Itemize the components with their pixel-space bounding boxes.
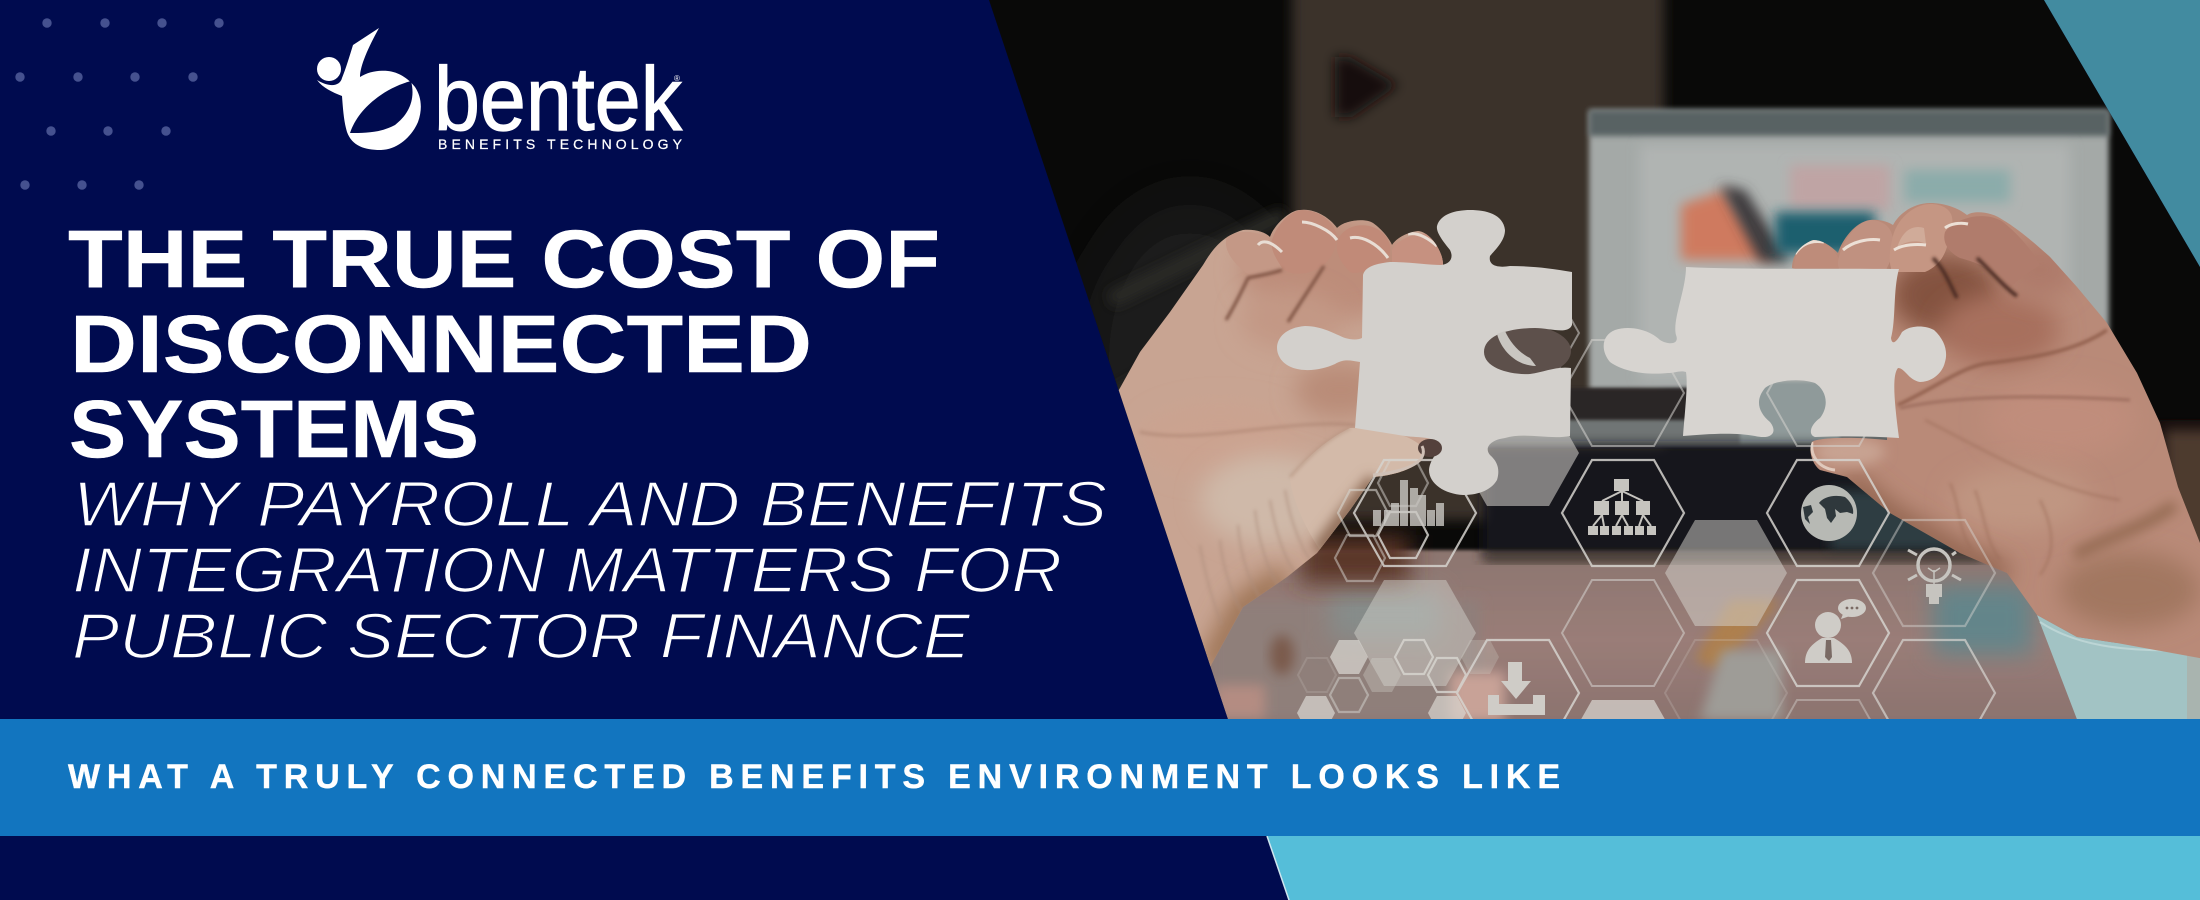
outline hexagons behind pieces xyxy=(1297,318,1871,719)
shirt cuff xyxy=(2037,615,2200,722)
logo: bentek xyxy=(317,28,683,152)
icon: swoosh figure xyxy=(317,28,421,150)
cyan bottom panel xyxy=(1267,836,2200,900)
right puzzle piece xyxy=(1604,267,1946,438)
title: THE TRUE COST OF xyxy=(68,214,940,305)
notch background behind left piece xyxy=(1483,326,1571,376)
title xyxy=(68,214,940,475)
blurred office background xyxy=(980,0,2200,730)
thumb xyxy=(1304,428,1422,550)
fingertips xyxy=(1226,210,1444,275)
filled translucent hexagons xyxy=(1297,436,1787,719)
subtitle: WHY PAYROLL AND BENEFITS xyxy=(73,468,1107,540)
bright outline hexagons xyxy=(1330,460,1995,746)
title: SYSTEMS xyxy=(69,384,479,475)
tagline: BENEFITS TECHNOLOGY xyxy=(438,136,683,152)
teal corner shape xyxy=(2044,0,2200,267)
wordmark: bentek xyxy=(434,50,683,150)
icon: download arrow xyxy=(1488,662,1545,715)
icon: phone in notch xyxy=(1497,331,1536,366)
icon: person with speech bubble xyxy=(1805,599,1866,663)
subtitle: PUBLIC SECTOR FINANCE xyxy=(72,600,971,672)
blue banner xyxy=(0,719,2200,836)
icon: org chart xyxy=(1588,479,1656,535)
fingertips xyxy=(1864,204,2024,272)
subtitle: INTEGRATION MATTERS FOR xyxy=(72,534,1062,606)
right hand xyxy=(1780,190,2200,670)
left hand xyxy=(1118,210,1443,666)
icon: bar chart xyxy=(1373,480,1444,526)
cyan panel edge highlight xyxy=(1267,836,1289,900)
icon: light bulb xyxy=(1908,549,1961,604)
subtitle xyxy=(72,468,1107,672)
decorative dot grid xyxy=(15,18,224,190)
left puzzle piece xyxy=(1277,210,1572,495)
registered mark: ® xyxy=(674,74,680,83)
icon: globe xyxy=(1801,485,1857,541)
left thumb nail xyxy=(1373,446,1423,475)
title: DISCONNECTED xyxy=(70,299,812,390)
banner text: WHAT A TRULY CONNECTED BENEFITS ENVIRONMENT LOOKS LIKE xyxy=(68,758,1560,796)
photo: hands joining puzzle pieces xyxy=(989,0,2200,719)
